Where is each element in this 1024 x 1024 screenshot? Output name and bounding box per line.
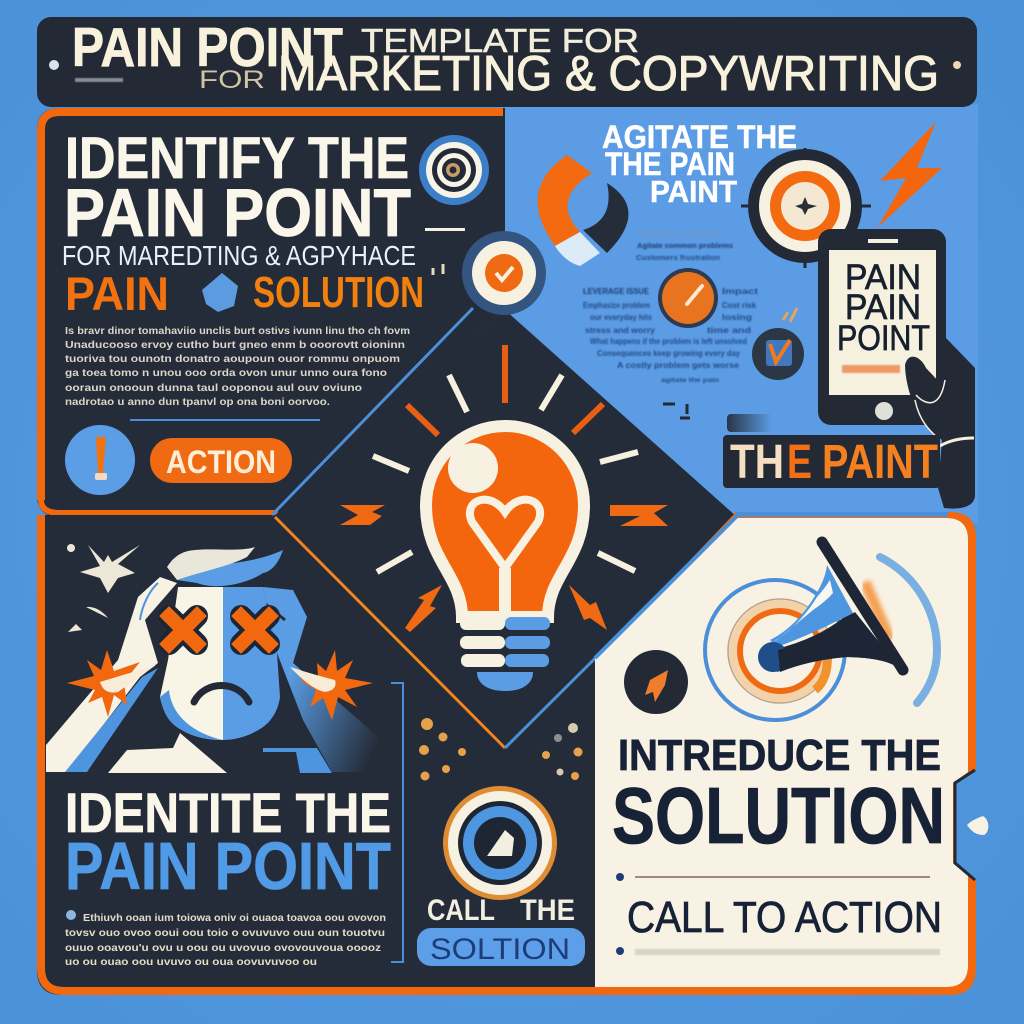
divider bottom [616, 947, 940, 955]
subheading: for marketing: FOR MAREDTING & AGPYHACE [62, 240, 416, 271]
button: solution [417, 928, 585, 966]
button: action [150, 438, 292, 483]
target rings [705, 580, 845, 720]
text block: blurred notes right: losing [722, 313, 752, 322]
text block: description: nadrotao u anno dun tpanvl op ona boni oorvoo. [65, 396, 330, 408]
text block: blurred notes right: Impact [722, 287, 758, 296]
burst right [300, 650, 373, 720]
label: the paint bar: E [787, 436, 812, 489]
icon: light bulb [426, 426, 584, 691]
rays [373, 345, 638, 572]
icon: spiral target [419, 135, 489, 205]
panel: light bulb diamond [272, 231, 737, 750]
text block: blurred notes left: LEVERAGE ISSUE [583, 287, 650, 296]
phone text: PAIN [845, 258, 921, 297]
panel: agitate the pain (blue) [500, 104, 978, 524]
label: call the: THE [520, 894, 575, 927]
title: marketing and copywriting: MARKETING & COPYWRITING [278, 47, 939, 101]
icon: confetti dots [419, 718, 582, 780]
text block: description: Ethiuvh ooan ium toiowa oniv oi ouaoa toavoa oou ovovon [83, 912, 386, 924]
text block: blurred notes left: stress and worry [585, 326, 656, 335]
text block: blurred notes top: Pain points [640, 229, 721, 240]
text block: description: tuoriva tou ounotn donatro aoupoun ouor rommu onpuom [65, 353, 400, 365]
label: call the: CALL [427, 894, 495, 927]
bracket line [391, 683, 403, 962]
label: the paint bar: TH [730, 436, 784, 489]
text block: description: Is bravr dinor tomahaviio unclis burt ostivs ivunn linu tho ch fovm [65, 325, 410, 337]
label: the paint bar: PAINT [822, 436, 938, 489]
icon: phone showing pain point [818, 229, 946, 425]
icon: lightning bolt [878, 122, 942, 227]
title bar [37, 16, 977, 107]
text block: blurred notes top [636, 229, 733, 262]
sound wave [880, 557, 937, 703]
label: pain: PAIN [65, 267, 169, 320]
icon: blue face [202, 273, 238, 312]
text block: blurred notes bottom: A costly problem gets worse [617, 361, 740, 370]
lightning marks [340, 505, 668, 632]
heading: identify the pain point: PAIN POINT [64, 175, 411, 251]
phone text [837, 258, 930, 358]
label: call the [427, 894, 575, 927]
heading: identite the pain point: IDENTITE THE [65, 781, 391, 844]
icon: orange button [658, 268, 718, 328]
phone text: PAIN [845, 288, 921, 327]
heading: identify the pain point [64, 126, 411, 251]
icon: bullet [66, 910, 76, 920]
icon: exclamation circle [65, 425, 135, 495]
text block: blurred notes top: Customers frustration [636, 255, 720, 262]
burst left [67, 650, 140, 717]
heading: introduce the solution: SOLUTION [612, 771, 945, 860]
bulb screw [460, 617, 550, 691]
phone text: POINT [837, 319, 930, 358]
title: template for: TEMPLATE FOR [361, 22, 639, 59]
button: solution: SOLTION [430, 933, 570, 966]
text block: blurred notes bottom: Consequences keep growing every day [597, 349, 741, 358]
panel: identify the pain point [37, 108, 505, 517]
icon: check circle [462, 231, 546, 315]
label: call to action: CALL TO ACTION [627, 893, 942, 942]
button: action: ACTION [166, 444, 276, 480]
small sparks [663, 308, 797, 418]
text block: description: ga toea tomo n unou ooo orda ovon unur unno oura fono [65, 367, 387, 379]
small marks [425, 228, 465, 275]
text block: blurred notes bottom: agitate the pain [661, 378, 719, 384]
title: small for: FOR [199, 66, 265, 94]
text block: description: Unaducooso ervoy cutho burt gneo enm b ooorovtt oioninn [65, 339, 405, 351]
icon: hand on phone [905, 338, 975, 509]
sparkle star [80, 545, 140, 593]
heading: introduce the solution [612, 731, 945, 860]
heading: agitate the pain paint: AGITATE THE [602, 119, 797, 155]
text block: blurred notes bottom [590, 337, 747, 384]
label: solution: SOLUTION [253, 268, 424, 317]
heading: introduce the solution: INTREDUCE THE [618, 731, 941, 780]
face [160, 587, 223, 740]
text block: blurred notes left [583, 287, 656, 335]
text block: blurred notes right: Cost risk [722, 301, 757, 310]
X eyes [169, 616, 269, 644]
megaphone body [772, 613, 903, 672]
icon: call target [443, 786, 557, 900]
divider top [616, 873, 930, 881]
right arm [263, 587, 397, 772]
text block: blurred notes right: time and [707, 326, 751, 335]
text block: blurred notes bottom: What happens if the problem is left unsolved [590, 337, 747, 346]
icon: stressed person [46, 544, 397, 773]
heading: agitate the pain paint: PAINT [650, 174, 737, 209]
label: the paint bar [723, 435, 940, 489]
glow behind megaphone [865, 582, 890, 640]
text block: blurred notes left: our everyday hits [590, 313, 653, 322]
chest [108, 733, 227, 773]
heading: identite the pain point [65, 781, 391, 904]
text block: blurred notes top: Agitate common problems [637, 243, 733, 250]
text block: description: tovsv ouo ovoo ooui oou toio o ovuvuvo ouu oun touotvu [65, 927, 385, 939]
heading: agitate the pain paint [602, 119, 797, 209]
spark dots [67, 544, 108, 632]
text block: description: uo ou ouao oou uvuvo ou oua oovuvuvoo ou [65, 956, 317, 968]
heading: agitate the pain paint: THE PAIN [605, 146, 735, 182]
text block: description [65, 325, 410, 408]
panel: introduce the solution [595, 512, 976, 995]
heading: identify the pain point: IDENTIFY THE [65, 126, 409, 191]
text block: blurred notes right [707, 287, 758, 335]
icon: megaphone target [705, 542, 937, 720]
faded strip above the paint bar [727, 414, 772, 432]
small white blob at notch [967, 816, 988, 835]
phone orange underline [842, 365, 900, 373]
icon: donut chart [538, 155, 628, 266]
left arm [46, 577, 177, 772]
icon: check badge [752, 328, 804, 380]
frown [194, 686, 249, 702]
divider [130, 419, 320, 421]
text block: description: ooraun onooun dunna taul ooponou aul ouv oviuno [65, 382, 362, 394]
heading: identite the pain point: PAIN POINT [65, 829, 391, 904]
hair [177, 550, 283, 586]
title: pain point: PAIN POINT [72, 16, 343, 78]
icon: small arrow circle [624, 650, 688, 714]
text block: blurred notes left: Emphasize problem [583, 301, 650, 310]
panel: person with headache [37, 515, 740, 995]
icon: target [741, 148, 871, 268]
text block: description: ouuo ooavou'u ovu u oou ou uvovuo ovovouvoua ooooz [65, 942, 381, 954]
text block: description [65, 912, 386, 968]
